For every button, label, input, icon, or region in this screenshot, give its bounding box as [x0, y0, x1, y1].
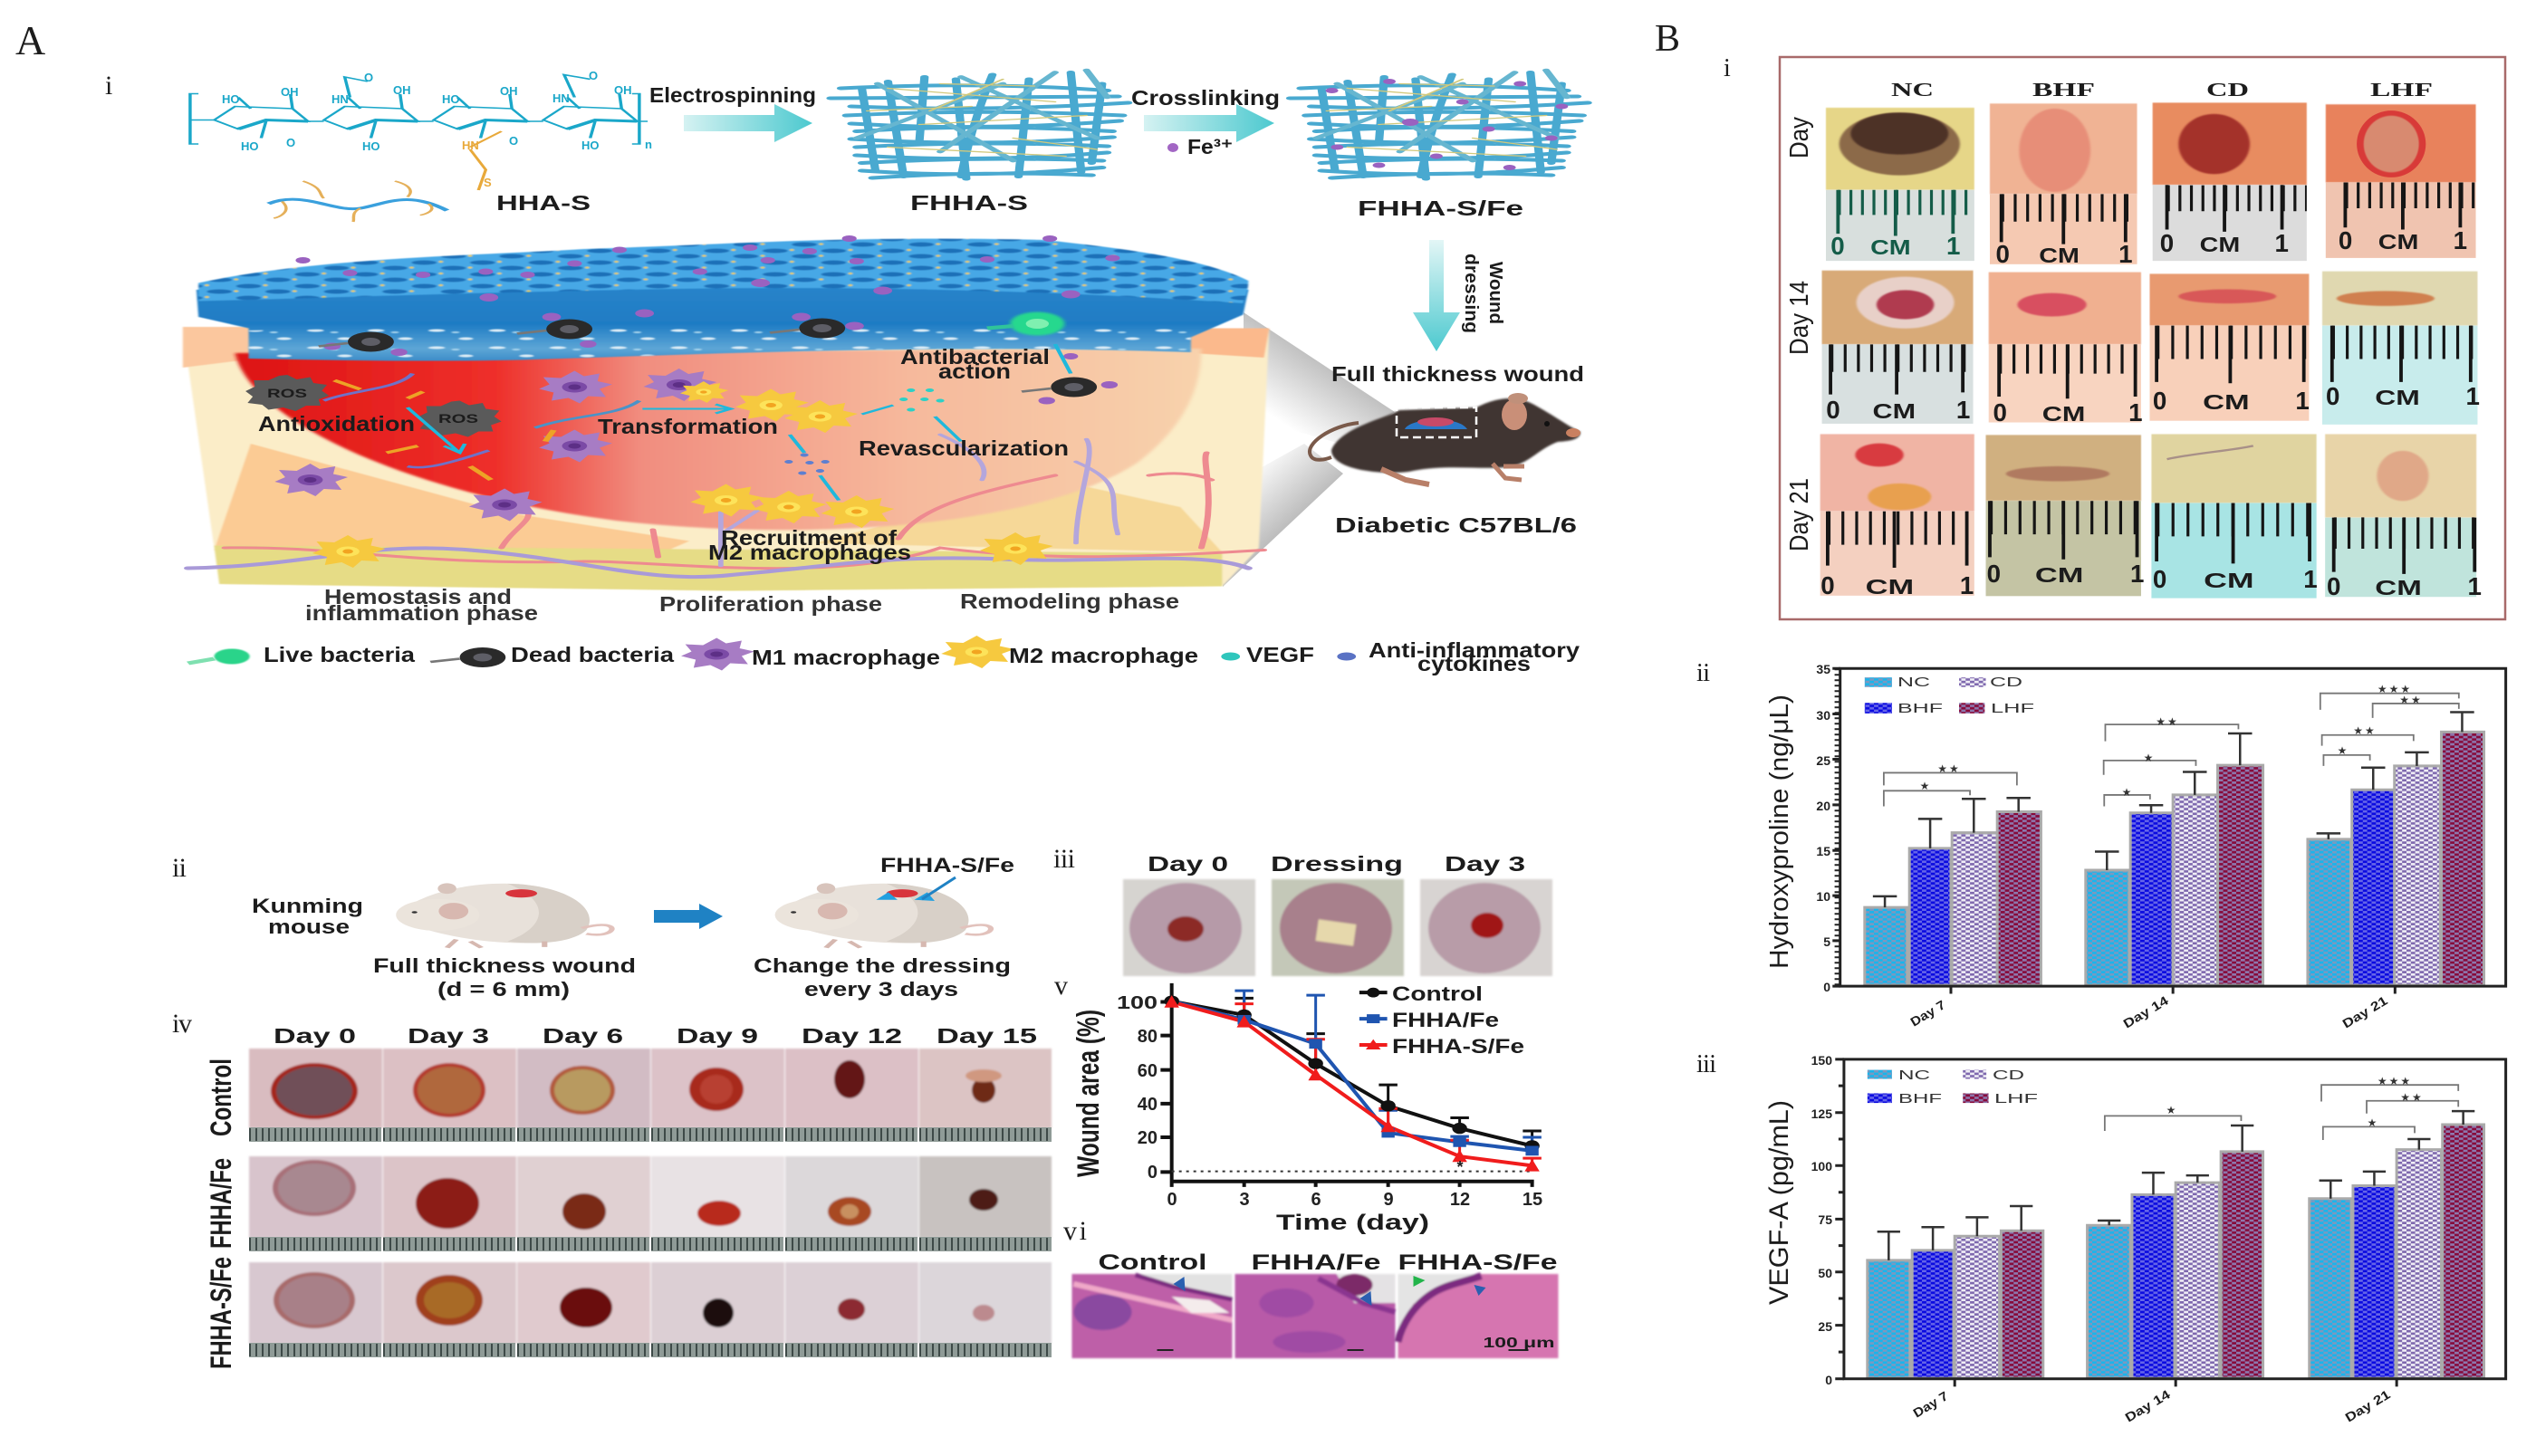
y ticks [1816, 662, 1830, 994]
label: ii: ii [172, 853, 187, 883]
y-axis ticks: 20 [1138, 1128, 1158, 1148]
histology: Control [1072, 1274, 1232, 1358]
icon: polymer chain [268, 181, 447, 222]
arrow: wound dressing [1413, 240, 1460, 351]
header: day columns: Day 3 [408, 1024, 489, 1048]
annotation: Recruitment of M2 macrophages: M2 macrophages [708, 541, 911, 564]
y-axis ticks: 0 [1148, 1163, 1158, 1183]
significance stars [2166, 1075, 2424, 1129]
bacteria in wound [319, 331, 394, 351]
caption: full thickness wound [373, 954, 636, 1001]
label: FHHA-S/Fe: FHHA-S/Fe [880, 854, 1014, 876]
photo row: FHHA-S/Fe [249, 1262, 1052, 1357]
ruler scale labels: CM [2203, 390, 2250, 414]
polymer chains in wound [324, 373, 639, 480]
label: Full thickness wound: Full thickness wound [1331, 362, 1584, 386]
photo row: Control [249, 1049, 1052, 1142]
ruler scale labels: 1 [2128, 398, 2143, 426]
y ticks: 100 [1811, 1159, 1832, 1173]
label: i: i [105, 71, 112, 101]
chemical structure: HN [462, 139, 479, 152]
header: iii days: Day 3 [1445, 852, 1525, 876]
frame: photo grid [1780, 57, 2505, 619]
header: day columns: Day 6 [543, 1024, 623, 1048]
y-axis title: VEGF-A (pg/mL) [1764, 1100, 1794, 1305]
ruler scale labels: 1 [2454, 226, 2467, 254]
chart: hydroxyproline [1765, 662, 2506, 1031]
legend: NC [1898, 1068, 1930, 1083]
chemical structure: OH [614, 83, 632, 97]
y ticks: 25 [1818, 1319, 1832, 1334]
zoom wedge to mouse [1223, 312, 1395, 587]
header: iii days [1148, 852, 1525, 876]
y ticks: 125 [1811, 1106, 1832, 1121]
label: wound dressing: Wound [1485, 262, 1505, 324]
x-axis title: Time (day) [1276, 1211, 1429, 1235]
VEGF and cytokine dots [899, 388, 945, 411]
ruler scale labels: 0 [1995, 240, 2010, 268]
label: ii: ii [1696, 659, 1710, 687]
label: Crosslinking: Crosslinking [1131, 86, 1280, 110]
significance star: * [1456, 1158, 1464, 1176]
ruler scale labels: CM [2042, 402, 2085, 426]
legend: Fe3+ [1167, 135, 1233, 158]
row labels [1785, 117, 1814, 551]
header: day columns [274, 1024, 1037, 1048]
sub-panel vi: histology [1072, 1250, 1558, 1358]
label: Kunming mouse: Kunming [252, 895, 363, 917]
phase label: Hemostasis [305, 585, 538, 625]
x-axis ticks: 3 [1239, 1190, 1250, 1210]
y-axis ticks: 100 [1117, 993, 1158, 1013]
significance stars: ★ [2368, 1116, 2378, 1129]
ruler scale labels: CM [2375, 386, 2420, 409]
legend: FHHA-S/Fe [1392, 1035, 1524, 1058]
y ticks: 0 [1823, 980, 1830, 994]
row labels: Day 14 [1785, 281, 1814, 355]
photo: day 0 [1123, 879, 1255, 976]
label: Diabetic C57BL/6: Diabetic C57BL/6 [1335, 513, 1577, 537]
ruler scale labels: CM [2378, 230, 2418, 254]
chemical structure: OH [393, 83, 411, 97]
row label: FHHA-S/Fe: FHHA-S/Fe [205, 1257, 237, 1369]
annotation: Recruitment of M2 macrophages: Recruitment of [721, 526, 897, 550]
y ticks: 10 [1816, 889, 1830, 904]
significance stars: ★★ [2400, 1091, 2424, 1104]
arrow: electrospinning [684, 104, 812, 142]
chemical structure: O [286, 136, 295, 149]
legend: Dead bacteria [511, 643, 674, 666]
significance stars: ★★ [1937, 762, 1961, 775]
y ticks [1811, 1053, 1832, 1387]
caption: change dressing: every 3 days [804, 978, 958, 1001]
header: iii days: Day 0 [1148, 852, 1228, 876]
legend: cytokines [1417, 652, 1531, 675]
header: day columns: Day 15 [937, 1024, 1037, 1048]
label: iii: iii [1696, 1050, 1716, 1078]
chemical structure: HO [581, 139, 600, 152]
nanofibre mesh: FHHA-S [831, 71, 1129, 179]
ruler scale labels: CM [2200, 233, 2240, 256]
ruler scale labels: CM [1873, 399, 1916, 423]
ruler scale labels: 1 [1956, 396, 1970, 424]
legend: LHF [1994, 1091, 2038, 1106]
annotation: Antibacterial action [900, 345, 1050, 383]
significance stars: ★★ [2399, 694, 2423, 706]
label: iv: iv [172, 1009, 192, 1039]
chemical structure: O [509, 134, 518, 148]
header: groups: NC [1891, 79, 1934, 101]
x-axis ticks [1167, 1190, 1542, 1210]
row 1 photos [1826, 102, 2476, 264]
row label: Control: Control [205, 1058, 237, 1136]
iron dots on dressing [295, 235, 1119, 404]
x labels: Day 7 [1907, 997, 1948, 1030]
sub-panel iv: wound photo grid [205, 1024, 1052, 1369]
ruler scale labels: 1 [2466, 382, 2480, 410]
ruler scale labels: 0 [1987, 560, 2001, 588]
ruler scale labels: 0 [2339, 226, 2352, 254]
y-axis ticks: 60 [1138, 1061, 1158, 1081]
row 2 photos [1822, 271, 2477, 425]
ruler scale labels: 0 [1993, 398, 2007, 426]
annotation: Transformation: Transformation [598, 415, 778, 438]
ruler scale labels: 0 [2326, 382, 2339, 410]
ruler scale labels: CM [1870, 235, 1911, 259]
ruler scale labels: CM [2039, 244, 2080, 267]
arrow: to dressing [922, 877, 956, 899]
schematic artwork: dressing and wound [183, 235, 1269, 590]
legend: M2 macrophage [1009, 644, 1198, 667]
phase label: Hemostasis: inflammation phase [305, 601, 538, 625]
skin block [183, 327, 1269, 590]
ruler scale labels: CM [2375, 576, 2422, 599]
legend: Anti-inflammatory [1369, 638, 1580, 662]
blood vessels [188, 435, 1264, 577]
arrow: crosslinking [1144, 104, 1274, 142]
legend: VEGF [1246, 643, 1314, 666]
significance stars: ★ [2122, 786, 2133, 799]
x-axis ticks: 15 [1523, 1190, 1542, 1210]
header: day columns: Day 0 [274, 1024, 356, 1048]
histology: FHHA/Fe [1235, 1274, 1395, 1358]
header: groups: LHF [2370, 79, 2433, 101]
y-axis ticks: 80 [1138, 1027, 1158, 1047]
x labels [1907, 992, 2390, 1031]
scale bar label: 100 μm [1484, 1336, 1554, 1351]
annotation: Antioxidation: Antioxidation [258, 412, 415, 436]
ruler scale labels: 1 [2130, 560, 2145, 588]
y ticks: 0 [1825, 1373, 1832, 1387]
y ticks: 30 [1816, 708, 1830, 723]
x-axis ticks: 9 [1383, 1190, 1394, 1210]
ruler scale labels: 0 [2153, 387, 2166, 415]
legend: CD [1993, 1068, 2024, 1083]
legend: BHF [1898, 1091, 1942, 1106]
chemical structure: O [589, 69, 598, 82]
x labels: Day 21 [2342, 1386, 2393, 1425]
phase label: Remodeling: Remodeling phase [960, 589, 1179, 613]
significance stars: ★★ [2353, 724, 2377, 737]
label: v: v [1054, 971, 1068, 1001]
header: histology groups: FHHA/Fe [1252, 1250, 1380, 1275]
photo: day 3 [1420, 879, 1552, 976]
y ticks: 150 [1811, 1053, 1832, 1068]
y-axis ticks [1117, 993, 1158, 1183]
ruler scale labels [1820, 226, 2482, 600]
label: wound dressing: dressing [1461, 254, 1481, 333]
header: histology groups: FHHA-S/Fe [1398, 1250, 1558, 1275]
header: groups: CD [2206, 79, 2249, 101]
chart lines [1160, 983, 1542, 1187]
wound bed [235, 349, 1201, 530]
legend: Fe3+: Fe³⁺ [1187, 135, 1233, 158]
label: iii: iii [1053, 844, 1075, 874]
heading: B: B [1655, 18, 1680, 60]
row labels: Day 21 [1785, 478, 1814, 551]
photo: dressing [1272, 879, 1404, 976]
macrophages [539, 371, 612, 404]
ruler scale labels: CM [2204, 569, 2254, 592]
ruler scale labels: 1 [1960, 571, 1974, 599]
annotation: Recruitment of M2 macrophages [708, 526, 911, 564]
ruler scale labels: CM [1866, 575, 1914, 599]
ruler scale labels: 0 [2153, 565, 2166, 593]
x-axis ticks: 0 [1167, 1190, 1177, 1210]
chemical structure: HN [331, 92, 349, 106]
ruler scale labels: 1 [2468, 572, 2482, 600]
ROS markers [245, 375, 329, 411]
legend: Control [1392, 982, 1483, 1005]
header: groups: BHF [2032, 79, 2095, 101]
y ticks: 20 [1816, 799, 1830, 813]
ruler scale labels: 0 [2160, 229, 2174, 257]
dressing [197, 279, 1248, 361]
header: day columns: Day 12 [802, 1024, 902, 1048]
legend: NC [1897, 675, 1930, 690]
ruler scale labels: 1 [2295, 387, 2310, 415]
x labels: Day 21 [2339, 992, 2390, 1031]
caption: change dressing: Change the dressing [754, 954, 1011, 977]
label: FHHA-S: FHHA-S [910, 191, 1028, 215]
sub-panel iii: photos [1123, 852, 1552, 976]
chemical structure [190, 69, 652, 190]
label: vi: vi [1063, 1216, 1087, 1246]
legend: Live bacteria [264, 643, 415, 666]
sub-panel v: wound area line chart [1071, 982, 1542, 1235]
y ticks: 35 [1816, 662, 1830, 676]
significance stars: ★ [2144, 752, 2155, 764]
chemical structure: HN [552, 91, 570, 105]
live bacterium [987, 311, 1064, 335]
y ticks: 5 [1823, 934, 1830, 949]
legend [1897, 675, 2034, 716]
legend [188, 636, 1580, 675]
label: Electrospinning: Electrospinning [649, 83, 816, 107]
nanofibre mesh: FHHA-S/Fe [1290, 71, 1588, 179]
sub-panel ii: experimental scheme [252, 854, 1014, 1001]
y ticks: 25 [1816, 753, 1830, 768]
chemical structure: S [484, 176, 492, 189]
photo grid artwork [1820, 102, 2477, 599]
annotation: ROS 2: ROS [438, 411, 478, 426]
header: histology groups [1098, 1250, 1558, 1275]
label: i: i [1724, 54, 1731, 82]
chart: VEGF-A [1764, 1053, 2506, 1425]
arrow: scheme [654, 904, 723, 929]
annotation: Antibacterial action: action [938, 359, 1011, 383]
caption: full thickness wound: (d = 6 mm) [437, 978, 570, 1001]
caption: change dressing [754, 954, 1011, 1001]
x labels: Day 7 [1910, 1388, 1951, 1421]
significance stars: ★★★ [2378, 683, 2412, 695]
ruler scale labels: 0 [2327, 572, 2340, 600]
y ticks: 15 [1816, 844, 1830, 858]
y-axis title: Hydroxyproline (ng/μL) [1765, 694, 1794, 969]
chemical structure: HO [442, 92, 460, 106]
legend: BHF [1897, 701, 1943, 716]
label: Kunming mouse [252, 895, 363, 938]
illustration: diabetic mouse [1310, 393, 1580, 484]
y-axis ticks: 40 [1138, 1095, 1158, 1115]
caption: full thickness wound: Full thickness wound [373, 954, 636, 977]
label: HHA-S: HHA-S [496, 191, 591, 215]
header: day columns: Day 9 [677, 1024, 758, 1048]
significance stars: ★ [2338, 744, 2349, 757]
header: histology groups: Control [1098, 1250, 1206, 1275]
histology: FHHA-S/Fe [1398, 1274, 1558, 1358]
significance stars: ★ [2166, 1104, 2177, 1116]
photo row: FHHA/Fe [249, 1156, 1052, 1251]
row label: FHHA/Fe: FHHA/Fe [205, 1158, 237, 1249]
x labels: Day 14 [2120, 992, 2171, 1031]
label: wound dressing [1461, 254, 1505, 333]
legend: LHF [1991, 701, 2034, 716]
y ticks: 75 [1818, 1212, 1832, 1227]
panel: B [1655, 18, 2506, 1425]
legend: FHHA/Fe [1392, 1009, 1499, 1031]
legend [1359, 982, 1524, 1058]
label: FHHA-S/Fe: FHHA-S/Fe [1358, 196, 1523, 220]
ruler scale labels: 0 [1830, 232, 1845, 260]
y ticks: 50 [1818, 1266, 1832, 1280]
annotation: Revascularization: Revascularization [859, 436, 1069, 460]
ruler ticks [1828, 182, 2477, 574]
x labels [1910, 1386, 2393, 1425]
ruler scale labels: 0 [1826, 396, 1840, 424]
legend: CD [1990, 675, 2022, 690]
ruler scale labels: 1 [1946, 232, 1960, 260]
panel: A [15, 17, 1588, 1369]
chemical structure: OH [500, 84, 518, 98]
row 3 photos [1820, 434, 2476, 599]
x-axis ticks: 6 [1311, 1190, 1321, 1210]
significance stars [1920, 683, 2423, 799]
x labels: Day 14 [2122, 1386, 2173, 1425]
bars, errors, axes [1832, 668, 2506, 993]
ruler scale labels: 0 [1820, 571, 1835, 599]
flow arrows [408, 344, 1071, 500]
chemical structure: HO [222, 92, 239, 106]
ruler scale labels: 1 [2118, 240, 2133, 268]
label: Kunming mouse: mouse [268, 915, 350, 938]
significance stars: ★ [1920, 780, 1931, 792]
phase label: Proliferation: Proliferation phase [659, 592, 882, 616]
chemical structure: O [364, 71, 373, 84]
ruler scale labels: 1 [2275, 229, 2289, 257]
chemical structure: HO [362, 139, 380, 153]
ruler scale labels: CM [2035, 563, 2083, 587]
significance stars: ★★★ [2378, 1075, 2412, 1087]
legend [1898, 1068, 2038, 1106]
chemical structure: HO [241, 139, 259, 153]
ruler scale labels: 1 [2303, 565, 2318, 593]
bars, errors, axes [1835, 1059, 2506, 1386]
header: groups [1891, 79, 2433, 101]
y-axis title: Wound area (%) [1071, 1010, 1106, 1177]
significance stars: ★★ [2156, 715, 2179, 728]
heading: A: A [15, 17, 45, 63]
header: iii days: Dressing [1271, 852, 1403, 876]
chemical structure: n [645, 138, 652, 151]
phase label: Hemostasis: Hemostasis and [324, 585, 512, 608]
annotation: ROS 1: ROS [267, 386, 307, 400]
x-axis ticks: 12 [1450, 1190, 1470, 1210]
row labels: Day [1785, 117, 1814, 158]
legend: M1 macrophage [752, 646, 940, 669]
annotation: Antibacterial action: Antibacterial [900, 345, 1050, 369]
chemical structure: OH [281, 85, 299, 99]
illustration: mouse with dressing [775, 883, 991, 948]
illustration: mouse with wound [396, 883, 612, 948]
